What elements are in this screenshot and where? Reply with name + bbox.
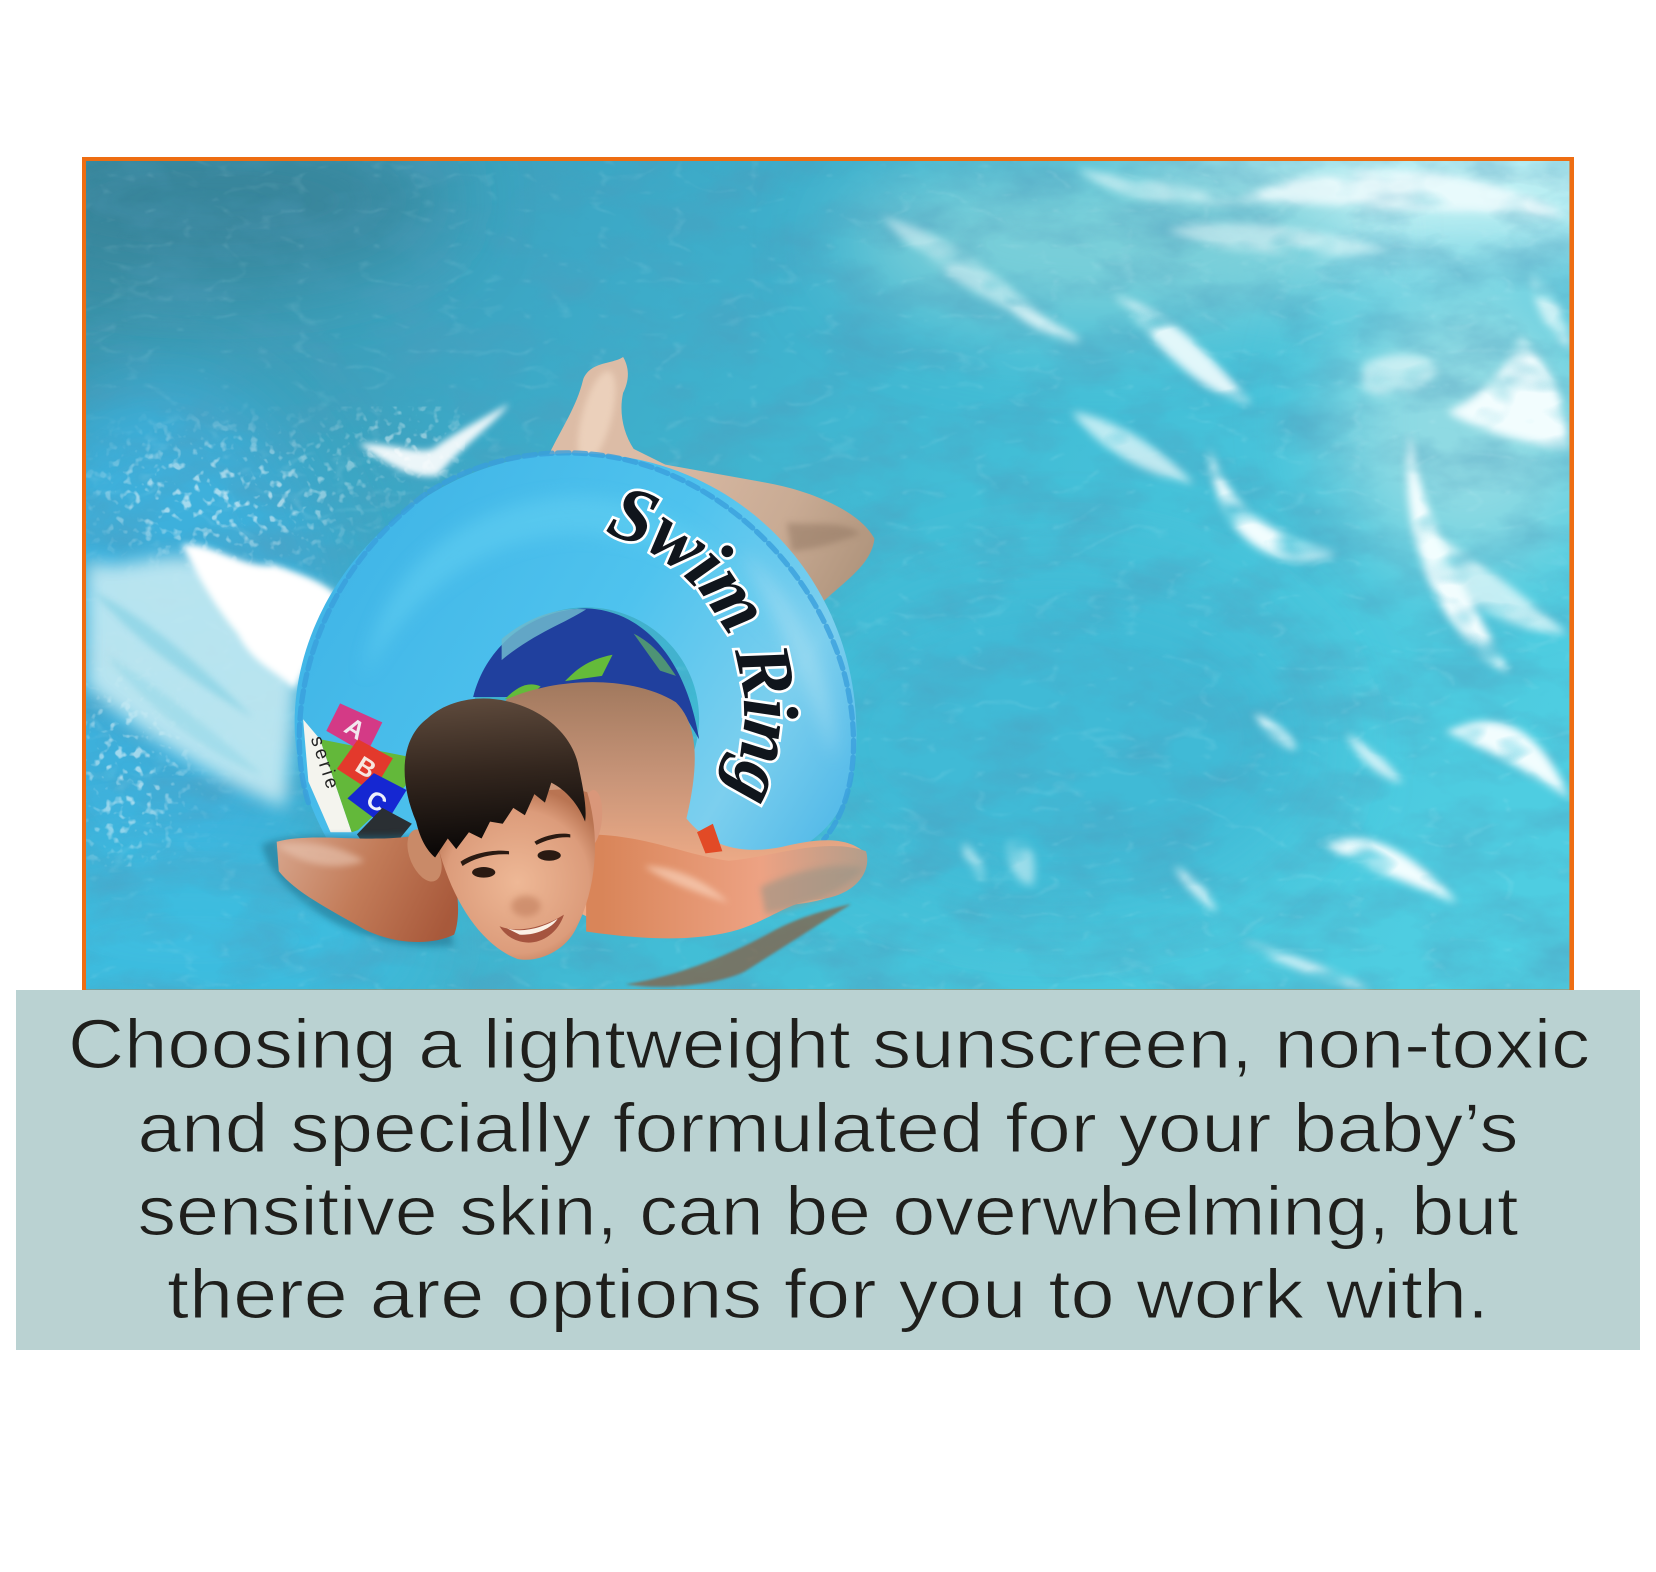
pool water xyxy=(86,161,1570,990)
hair xyxy=(405,699,586,858)
boy: back and torso xyxy=(506,682,862,916)
ring scalloped rim xyxy=(299,453,854,840)
boy: right arm xyxy=(586,834,867,938)
label: ABC series: B xyxy=(350,751,381,785)
right ear xyxy=(588,790,602,842)
speckled foam on water left of ring xyxy=(74,407,465,866)
ring body xyxy=(295,453,856,858)
eyes and brows xyxy=(460,834,570,878)
reflection under arm xyxy=(625,904,851,987)
swim ring xyxy=(294,450,856,850)
swim shorts in ring hole xyxy=(473,608,699,739)
splash: white water by ring xyxy=(87,403,509,808)
face xyxy=(435,789,595,960)
boy: left arm and shoulder xyxy=(277,834,458,942)
caption line 4: there are options for you to work with. xyxy=(167,1255,1489,1333)
left ear xyxy=(408,829,442,882)
water shadow around left arm xyxy=(262,834,454,947)
caption panel xyxy=(16,990,1640,1350)
caption line 3: sensitive skin, can be overwhelming, but xyxy=(138,1172,1519,1250)
red label corner xyxy=(697,824,722,853)
photo frame: orange border xyxy=(82,157,1574,997)
smile xyxy=(500,915,564,943)
label: ABC series: serie xyxy=(306,734,343,794)
label: ABC series xyxy=(303,703,412,847)
boy: head xyxy=(401,699,604,960)
label: ABC series: C xyxy=(361,785,391,819)
boy: foot and leg behind ring xyxy=(549,357,874,604)
ring lettering: Swim Ring xyxy=(603,488,801,808)
photo: boy in swim ring in pool xyxy=(86,161,1570,990)
label: ABC series: A xyxy=(339,712,370,746)
nose shadow xyxy=(511,896,541,917)
water highlights xyxy=(882,169,1569,991)
ring soft highlight xyxy=(376,498,680,644)
caption line 2: and specially formulated for your baby’s xyxy=(138,1089,1518,1167)
caption text xyxy=(68,1005,1590,1333)
caption line 1: Choosing a lightweight sunscreen, non-toxic xyxy=(68,1005,1590,1083)
